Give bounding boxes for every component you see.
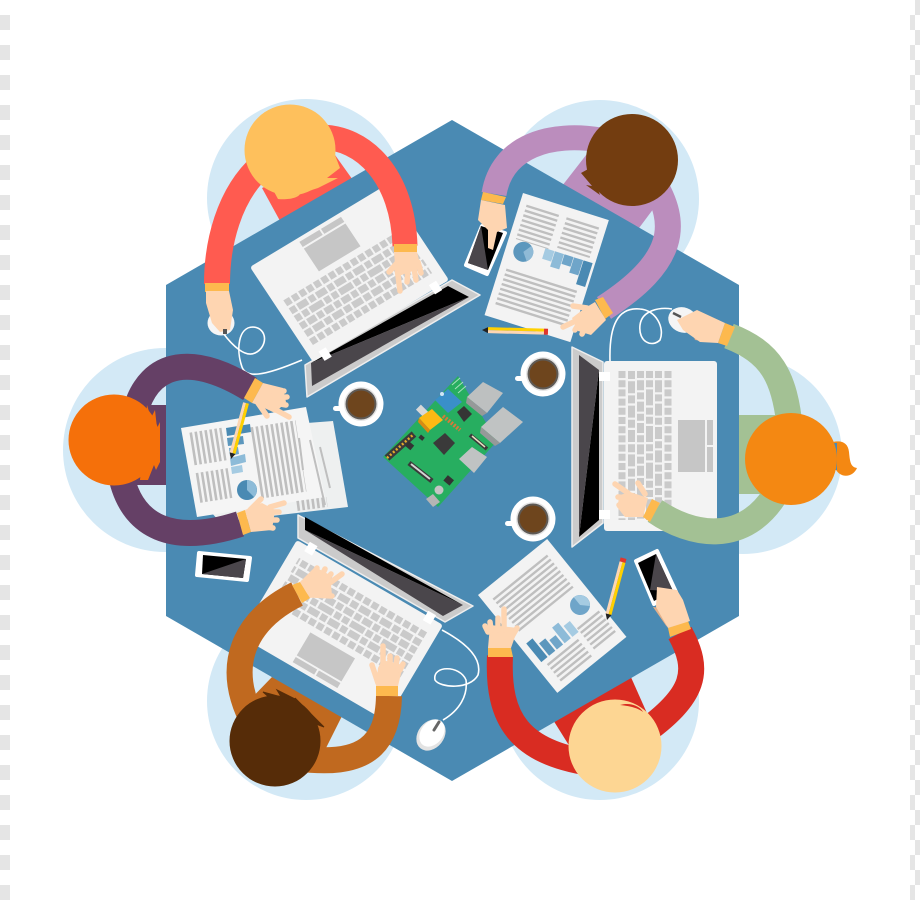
person: top left, red sleeves — [205, 104, 421, 334]
phone: bottom right — [636, 551, 676, 604]
mouse cables — [223, 308, 672, 720]
phone: near purple sleeve person — [466, 226, 505, 274]
person: top right, lilac sleeves — [478, 114, 678, 335]
pencil: bottom right — [604, 557, 626, 621]
paper: bottom right — [478, 539, 626, 693]
person: right, green sleeves — [615, 310, 857, 531]
paper: top right — [485, 193, 609, 342]
person: bottom left, brown sleeves — [230, 567, 403, 786]
phone: left side of the table — [197, 553, 250, 580]
hexagonal table — [166, 120, 739, 781]
torsos — [130, 150, 780, 760]
laptop: top left — [250, 185, 480, 397]
seat circles — [63, 99, 842, 800]
person: bottom right, red sleeves — [485, 587, 691, 792]
papers: left — [181, 407, 348, 522]
person: left, plum sleeves — [68, 367, 289, 535]
pencil: top — [482, 327, 548, 335]
pencil: left — [228, 402, 249, 460]
laptop: bottom left — [240, 515, 473, 721]
laptop: right — [572, 347, 717, 547]
raspberry pi board — [383, 376, 523, 507]
computer mice — [208, 303, 701, 756]
coffee cups — [333, 352, 566, 542]
